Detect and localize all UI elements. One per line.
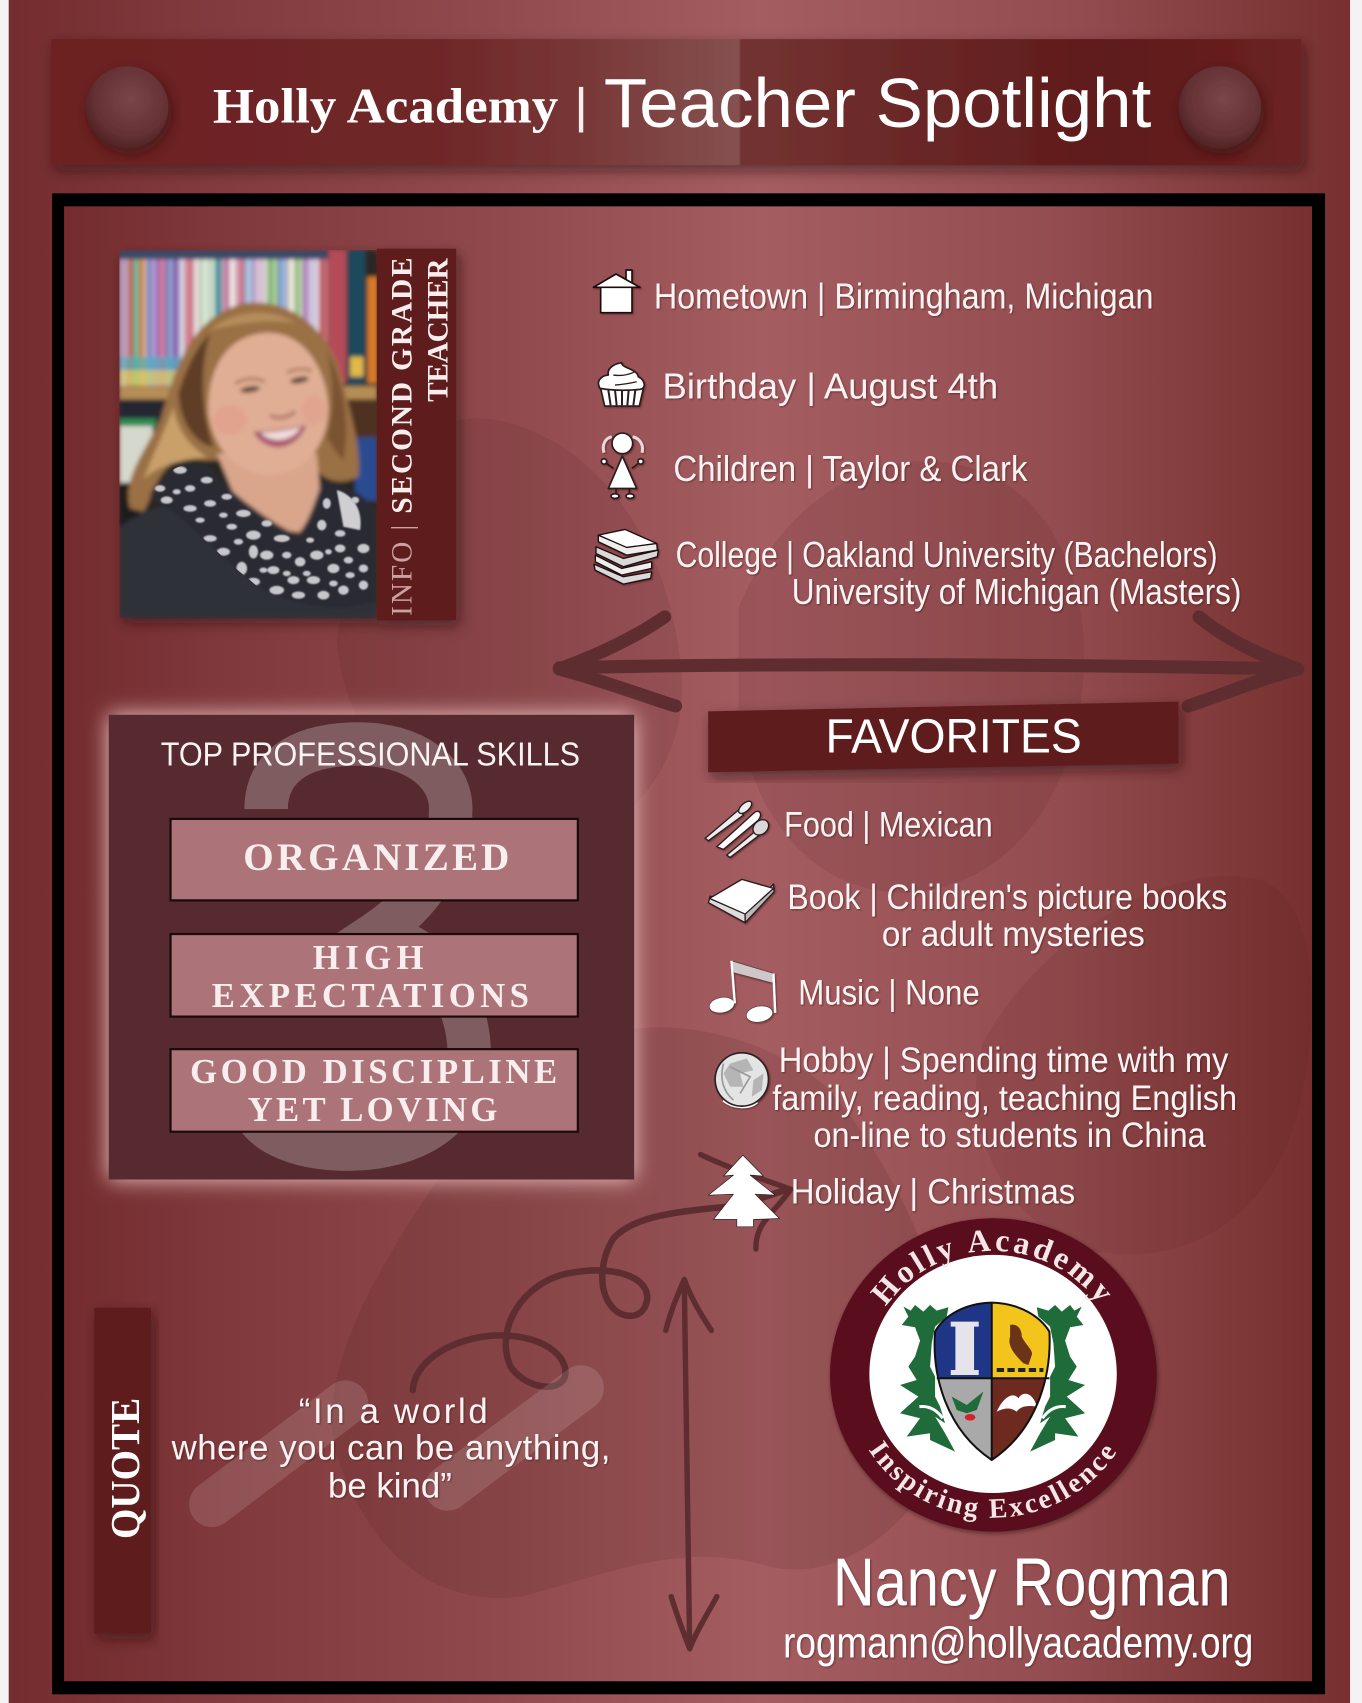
panel: top professional skills (109, 715, 634, 1180)
skill: organized (171, 819, 578, 900)
portrait card (119, 249, 456, 620)
quote text: where you can be anything, (171, 1430, 610, 1468)
music: Music | None (798, 975, 980, 1013)
icon: globe (715, 1053, 768, 1107)
info list (593, 270, 1241, 612)
icon: cutlery (705, 799, 772, 857)
icon: book (708, 879, 774, 923)
logo text: Holly Academy: Holly Academy (870, 1230, 1110, 1306)
arrow: vertical double-headed (666, 1279, 717, 1649)
skill: high expectations: HIGH (313, 938, 424, 977)
sidebar text: teacher: TEACHER (422, 258, 454, 402)
skill: good discipline yet loving: YET LOVING (248, 1090, 497, 1129)
title: Holly Academy: Holly Academy (213, 78, 558, 134)
title: Teacher Spotlight: Teacher Spotlight (604, 64, 1151, 142)
swirl arrow (413, 1155, 791, 1390)
icon: christmas tree (708, 1155, 779, 1227)
hobby second line: family, reading, teaching English (772, 1080, 1237, 1118)
sidebar: info (377, 249, 456, 620)
quote text (171, 1393, 610, 1506)
skill: high expectations (171, 934, 578, 1017)
skill: high expectations: EXPECTATIONS (212, 976, 529, 1015)
icon: right knob (1178, 66, 1261, 149)
background blobs (332, 418, 1312, 1598)
crest vines right (1030, 1305, 1085, 1452)
quote brush strokes (212, 1388, 581, 1504)
college second line: University of Michigan (Masters) (792, 572, 1241, 612)
icon: cupcake (598, 363, 644, 406)
quote side banner (95, 1308, 151, 1633)
crest shield (930, 1300, 1053, 1463)
sidebar text: info, second grade: INFO | SECOND GRADE (387, 257, 419, 616)
favorites banner: FAVORITES (825, 711, 1082, 764)
book: Book | Children's picture books (787, 879, 1227, 917)
icon: house (593, 270, 640, 313)
children: Children | Taylor & Clark (673, 449, 1028, 489)
book second line: or adult mysteries (882, 916, 1145, 954)
icon: girl figure (601, 433, 643, 498)
hobby: Hobby | Spending time with my (779, 1042, 1229, 1080)
arrow: horizontal double-headed (559, 617, 1298, 706)
skill: good discipline yet loving (171, 1049, 578, 1132)
crest vines left (900, 1305, 955, 1452)
header banner (51, 39, 1301, 165)
skills heading: TOP PROFESSIONAL SKILLS (161, 737, 580, 774)
birthday: Birthday | August 4th (663, 367, 998, 407)
holiday: Holiday | Christmas (791, 1173, 1075, 1211)
logo: Holly Academy crest (828, 1217, 1160, 1536)
teacher email: rogmann@hollyacademy.org (783, 1619, 1253, 1667)
teacher name: Nancy Rogman (833, 1545, 1231, 1620)
skill: good discipline yet loving: GOOD DISCIPLINE (190, 1052, 557, 1091)
favorites list (705, 799, 1237, 1155)
quote text: be kind” (328, 1468, 452, 1506)
skill: organized: ORGANIZED (243, 836, 509, 879)
food: Food | Mexican (784, 806, 993, 844)
quote text: “In a world (299, 1393, 488, 1431)
quote side banner: QUOTE (102, 1398, 148, 1539)
hometown: Hometown | Birmingham, Michigan (654, 276, 1153, 316)
photo of teacher (119, 250, 378, 618)
icon: stack of books (594, 529, 658, 584)
favorites banner (708, 702, 1178, 772)
icon: music notes (708, 961, 775, 1024)
icon: left knob (86, 66, 168, 149)
big numeral 3 (252, 744, 469, 1149)
college: College | Oakland University (Bachelors) (676, 535, 1218, 575)
logo text: Inspiring Excellence: Inspiring Excellence (868, 1440, 1116, 1522)
hobby third line: on-line to students in China (814, 1117, 1206, 1155)
title divider (579, 87, 583, 133)
